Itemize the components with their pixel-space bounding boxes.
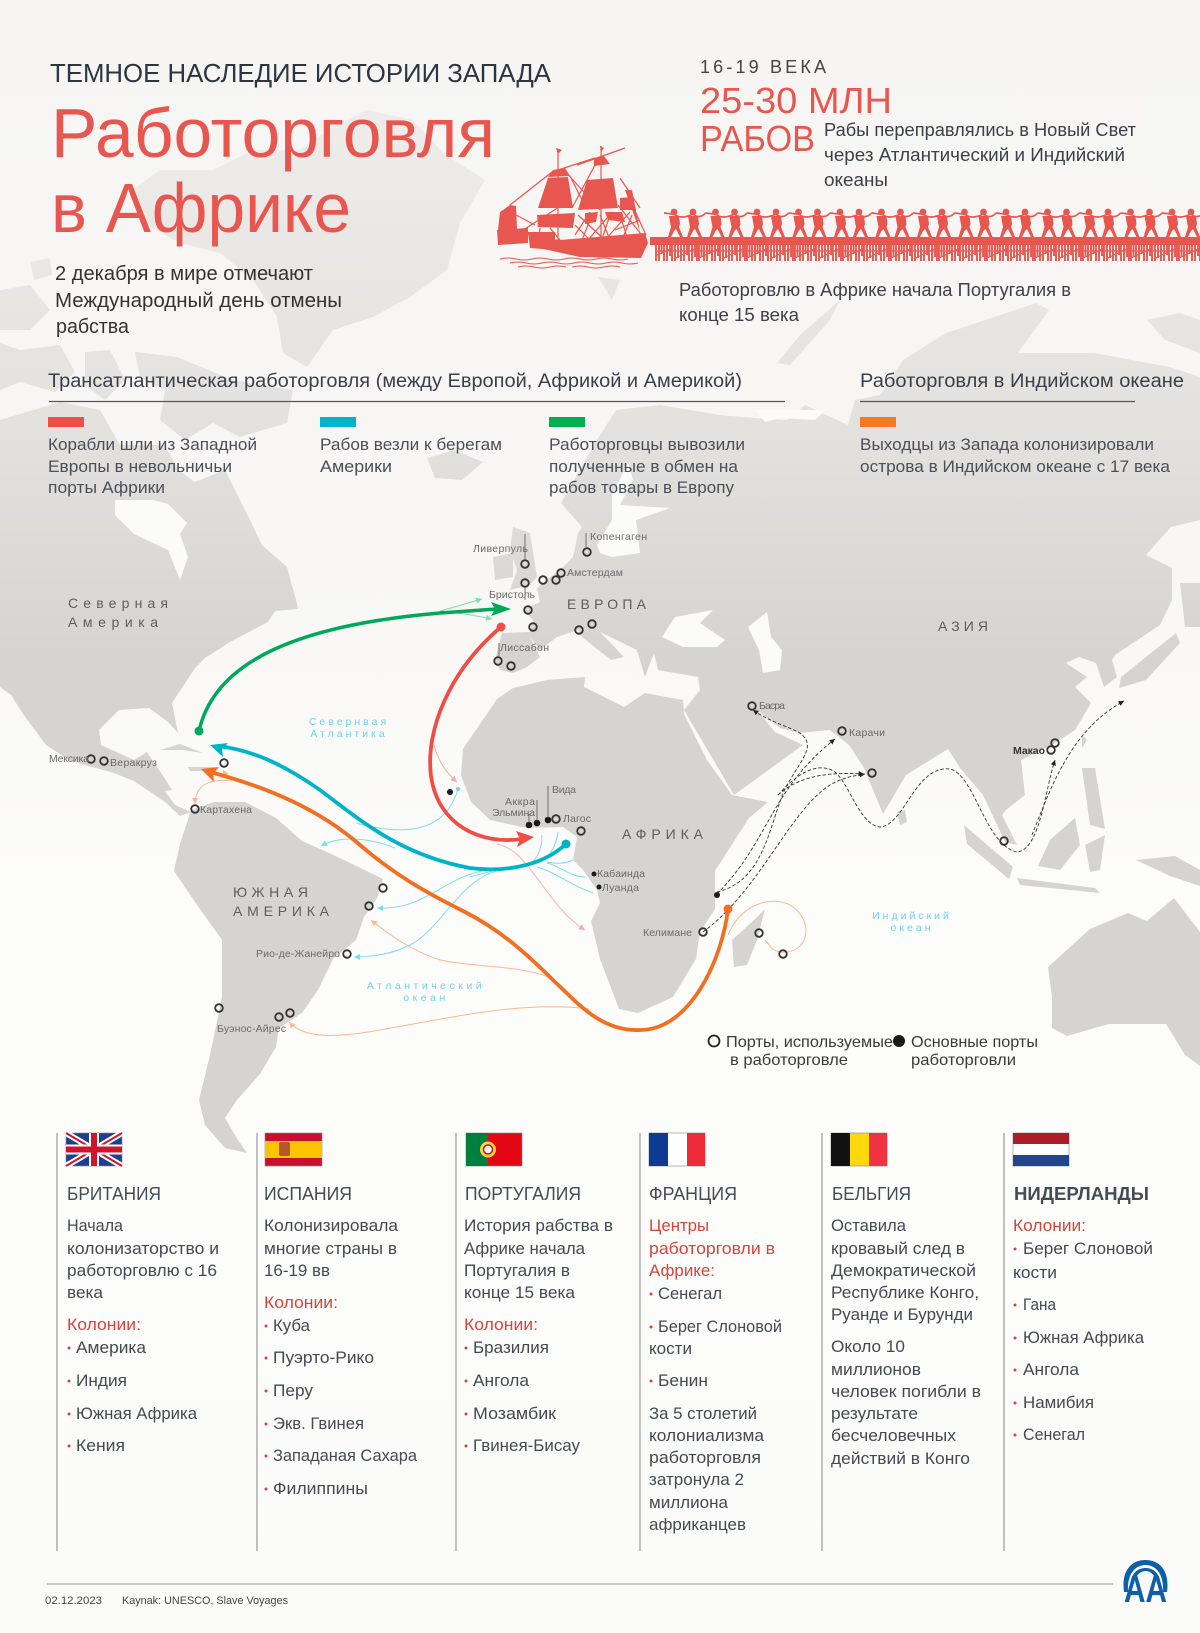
port labels: Карачи — [849, 727, 885, 739]
column: Netherlands: Сенегал — [1023, 1425, 1085, 1444]
column: Portugal — [464, 1133, 613, 1455]
inland seas — [115, 410, 826, 673]
heading: Indian Ocean trade: Работорговля в Индийском океане — [860, 371, 1184, 392]
flag: France — [649, 1133, 705, 1166]
column: Belgium: кровавый след в — [831, 1239, 965, 1258]
main title: в Африке — [51, 169, 351, 247]
map legend: ports — [708, 1034, 1038, 1069]
land: North America — [0, 402, 298, 816]
land: Australia — [1048, 898, 1200, 1066]
stat: centuries and number of slaves: 16-19 ВЕКА — [700, 57, 826, 77]
column: Britain: века — [67, 1283, 104, 1302]
land: Japan, Sakhalin, Taiwan, Sri Lanka — [897, 583, 1200, 825]
port labels: Келимане — [643, 927, 692, 939]
stat: centuries and number of slaves — [700, 57, 892, 159]
port labels: Кабаинда — [597, 868, 645, 880]
legend item: red route: Европы в невольничьи — [48, 458, 232, 476]
port labels: Луанда — [602, 882, 639, 894]
text: Portugal began: конце 15 века — [679, 305, 800, 325]
column: Britain: Начала — [67, 1216, 124, 1235]
map legend: ports: Основные порты — [911, 1034, 1038, 1051]
land: Caribbean islands — [160, 744, 214, 771]
flag: UK — [66, 1133, 122, 1166]
main title — [51, 94, 495, 247]
dashed Indian Ocean routes — [703, 701, 1124, 932]
column: France: Сенегал — [658, 1284, 722, 1303]
column: France — [649, 1133, 782, 1534]
text: crossing oceans — [824, 120, 1136, 190]
legend item: cyan route: Рабов везли к берегам — [320, 436, 502, 454]
column: France: Берег Слоновой — [658, 1317, 782, 1336]
port labels: Копенгаген — [590, 531, 647, 543]
continent labels — [68, 595, 988, 919]
subtitle: ТЕМНОЕ НАСЛЕДИЕ ИСТОРИИ ЗАПАДА — [50, 58, 552, 88]
continent labels: Америка — [68, 614, 158, 630]
text: crossing oceans: океаны — [824, 170, 888, 190]
port labels: Мексика — [49, 753, 89, 765]
port markers: main ports — [447, 787, 720, 898]
heading: transatlantic trade: Трансатлантическая работорговля (между Европой, Африкой и Америкой) — [48, 371, 742, 392]
column: Britain: колонизаторство и — [67, 1239, 219, 1258]
intro text — [55, 263, 342, 338]
footer: date and source: Kaynak: UNESCO, Slave Voyages — [122, 1595, 288, 1607]
column: Netherlands: Ангола — [1023, 1360, 1080, 1379]
column: Spain: Западаная Сахара — [273, 1446, 418, 1465]
legend item: cyan route — [320, 417, 502, 476]
port labels: Вида — [552, 784, 576, 796]
text: Portugal began — [679, 280, 1071, 325]
ocean labels — [309, 716, 952, 1004]
port labels: Буэнос-Айрес — [217, 1023, 286, 1035]
land: Eurasia — [495, 303, 1200, 845]
column: Britain: Колонии: — [67, 1315, 141, 1334]
port labels: Ливерпуль — [473, 543, 529, 555]
legend item: green route: полученные в обмен на — [549, 458, 739, 476]
flag: Netherlands — [1013, 1133, 1069, 1166]
column: Belgium: действий в Конго — [831, 1449, 970, 1468]
ocean labels: Атлантический — [367, 980, 485, 992]
column: France: Африке: — [649, 1261, 715, 1280]
port labels: Макао — [1013, 745, 1045, 757]
continent labels: Северная — [68, 595, 168, 611]
column: France: африканцев — [649, 1515, 746, 1534]
column: Belgium: человек погибли в — [831, 1382, 981, 1401]
flag: Portugal — [466, 1133, 522, 1166]
column: Spain: Филиппины — [273, 1479, 368, 1498]
legend item: orange route: Выходцы из Запада колонизировали — [860, 436, 1154, 454]
continent labels: АМЕРИКА — [233, 903, 330, 919]
column: Belgium — [831, 1133, 981, 1468]
column: France: кости — [649, 1339, 692, 1358]
land: Russian Arctic islands — [598, 277, 1200, 365]
column: Spain: ИСПАНИЯ — [264, 1184, 352, 1204]
column: Britain: Америка — [76, 1338, 147, 1357]
route: orange arrow around Cape — [201, 767, 732, 1030]
column: Britain: Южная Африка — [76, 1404, 198, 1423]
intro text: рабства — [56, 316, 130, 338]
intro text: Международный день отмены — [55, 290, 342, 312]
main title: Работорговля — [51, 94, 495, 172]
column: Spain: 16-19 вв — [264, 1261, 330, 1280]
column: Belgium: Оставила — [831, 1216, 907, 1235]
land: Greenland — [133, 110, 485, 367]
column: Belgium: БЕЛЬГИЯ — [832, 1184, 911, 1204]
column: Portugal: Бразилия — [473, 1338, 549, 1357]
column: Netherlands: Южная Африка — [1023, 1328, 1145, 1347]
column: Portugal: История рабства в — [464, 1216, 613, 1235]
text: crossing oceans: через Атлантический и Индийский — [824, 145, 1125, 165]
column: Spain: Экв. Гвинея — [273, 1414, 364, 1433]
column: France: Центры — [649, 1216, 709, 1235]
port markers: open circles — [87, 548, 1059, 1021]
port labels: Веракруз — [110, 757, 157, 769]
map legend: ports: в работорговле — [730, 1052, 848, 1069]
legend item: green route: рабов товары в Европу — [549, 479, 735, 497]
column: Portugal: Португалия в — [464, 1261, 570, 1280]
icon: AA logo: AA — [1124, 1569, 1167, 1611]
column: Spain: Пуэрто-Рико — [273, 1348, 374, 1367]
port labels: Бристоль — [489, 589, 536, 601]
land: British Isles and Iceland — [427, 450, 537, 590]
route: cyan arrow to America — [210, 743, 570, 869]
legend item: green route — [549, 417, 745, 497]
column: Britain — [66, 1133, 219, 1455]
land: Canadian Arctic islands — [0, 258, 293, 440]
column: Belgium: Руанде и Бурунди — [831, 1305, 973, 1324]
map legend: ports: работорговли — [911, 1052, 1016, 1069]
column: Spain: Колонизировала — [264, 1216, 399, 1235]
legend item: cyan route: Америки — [320, 458, 392, 476]
column: Belgium: Демократической — [831, 1261, 976, 1280]
column: France: работорговли в — [649, 1239, 775, 1258]
column: France: колониализма — [649, 1426, 765, 1445]
legend item: orange route: острова в Индийском океане с 17 века — [860, 458, 1171, 476]
ocean labels: Севернвая — [309, 716, 389, 728]
column: Belgium: результате — [831, 1404, 918, 1423]
intro text: 2 декабря в мире отмечают — [55, 263, 313, 285]
column: Netherlands: Колонии: — [1013, 1216, 1086, 1235]
icon: slave ship — [497, 146, 648, 268]
column: Spain — [264, 1133, 418, 1498]
port labels: Лиссабон — [500, 642, 549, 654]
flag: Belgium — [831, 1133, 887, 1166]
column: Britain: Индия — [76, 1371, 127, 1390]
route: red arrow to Africa — [430, 622, 534, 847]
land: South America — [174, 802, 383, 1153]
column: Portugal: конце 15 века — [464, 1283, 576, 1302]
map legend: ports: Порты, используемые — [726, 1034, 893, 1051]
ocean labels: океан — [403, 992, 449, 1004]
column: Belgium: Республике Конго, — [831, 1283, 979, 1302]
legend item: green route: Работорговцы вывозили — [549, 436, 745, 454]
ocean labels: Индийский — [872, 910, 952, 922]
footer: date and source — [45, 1595, 288, 1607]
column: Netherlands — [1013, 1133, 1153, 1444]
port labels: Амстердам — [567, 567, 623, 579]
column: Portugal: Африке начала — [464, 1239, 586, 1258]
column: Netherlands: Намибия — [1023, 1393, 1094, 1412]
continent labels: АЗИЯ — [938, 618, 988, 634]
ocean labels: Атлантика — [310, 728, 388, 740]
land: Madagascar — [732, 909, 765, 967]
land: Africa — [461, 677, 768, 1013]
column: Belgium: миллионов — [831, 1360, 921, 1379]
column: Spain: Куба — [273, 1316, 311, 1335]
column: Portugal: Колонии: — [464, 1315, 538, 1334]
stat: centuries and number of slaves: 25-30 МЛН — [700, 80, 892, 121]
flag: Spain — [265, 1133, 322, 1166]
ocean labels: океан — [890, 922, 934, 934]
continent labels: ЕВРОПА — [567, 596, 647, 612]
column: Britain: БРИТАНИЯ — [67, 1184, 161, 1204]
legend item: red route: Корабли шли из Западной — [48, 436, 257, 454]
column: Britain: работорговлю с 16 — [67, 1261, 217, 1280]
column: Netherlands: Берег Слоновой — [1023, 1239, 1153, 1258]
column: Portugal: Мозамбик — [473, 1404, 557, 1423]
column: Belgium: бесчеловечных — [831, 1426, 957, 1445]
world map background — [0, 110, 1200, 1153]
column: France: ФРАНЦИЯ — [649, 1184, 737, 1204]
column: Spain: Колонии: — [264, 1293, 338, 1312]
column: Netherlands: Гана — [1023, 1295, 1056, 1314]
text: Portugal began: Работорговлю в Африке начала Португалия в — [679, 280, 1071, 300]
port labels: Эльмина — [492, 807, 535, 819]
column: Portugal: ПОРТУГАЛИЯ — [465, 1184, 581, 1204]
port labels: Басра — [759, 700, 785, 712]
column: France: работорговля — [649, 1448, 761, 1467]
footer: date and source: 02.12.2023 — [45, 1595, 102, 1607]
route: green arrow to Europe — [194, 602, 511, 736]
legend item: red route — [48, 417, 257, 497]
port labels: Аккра — [505, 796, 535, 808]
legend item: orange route — [860, 417, 1171, 476]
column: France: Бенин — [658, 1371, 708, 1390]
icon: AA logo — [1124, 1560, 1167, 1611]
thin secondary routes — [195, 599, 806, 1035]
column: Spain: Перу — [273, 1381, 314, 1400]
column: Spain: многие страны в — [264, 1239, 397, 1258]
text: crossing oceans: Рабы переправлялись в Новый Свет — [824, 120, 1136, 140]
column: Netherlands: НИДЕРЛАНДЫ — [1014, 1184, 1149, 1204]
port labels: Рио-де-Жанейро — [256, 948, 340, 960]
column: France: миллиона — [649, 1493, 729, 1512]
column: Netherlands: кости — [1013, 1263, 1057, 1282]
column: Portugal: Гвинея-Бисау — [473, 1436, 580, 1455]
column: Portugal: Ангола — [473, 1371, 530, 1390]
continent labels: ЮЖНАЯ — [233, 884, 308, 900]
column: France: затронула 2 — [649, 1470, 744, 1489]
column: Belgium: Около 10 — [831, 1337, 905, 1356]
land: Southeast Asia islands — [964, 768, 1200, 893]
column: France: За 5 столетий — [649, 1404, 757, 1423]
continent labels: АФРИКА — [622, 826, 704, 842]
port labels: Картахена — [200, 804, 252, 816]
column: Britain: Кения — [76, 1436, 125, 1455]
port labels — [49, 531, 1045, 1035]
port labels: Лагос — [563, 813, 591, 825]
icon: chain of slaves on pier — [650, 205, 1200, 261]
stat: centuries and number of slaves: РАБОВ — [700, 118, 815, 159]
legend item: red route: порты Африки — [48, 479, 165, 497]
